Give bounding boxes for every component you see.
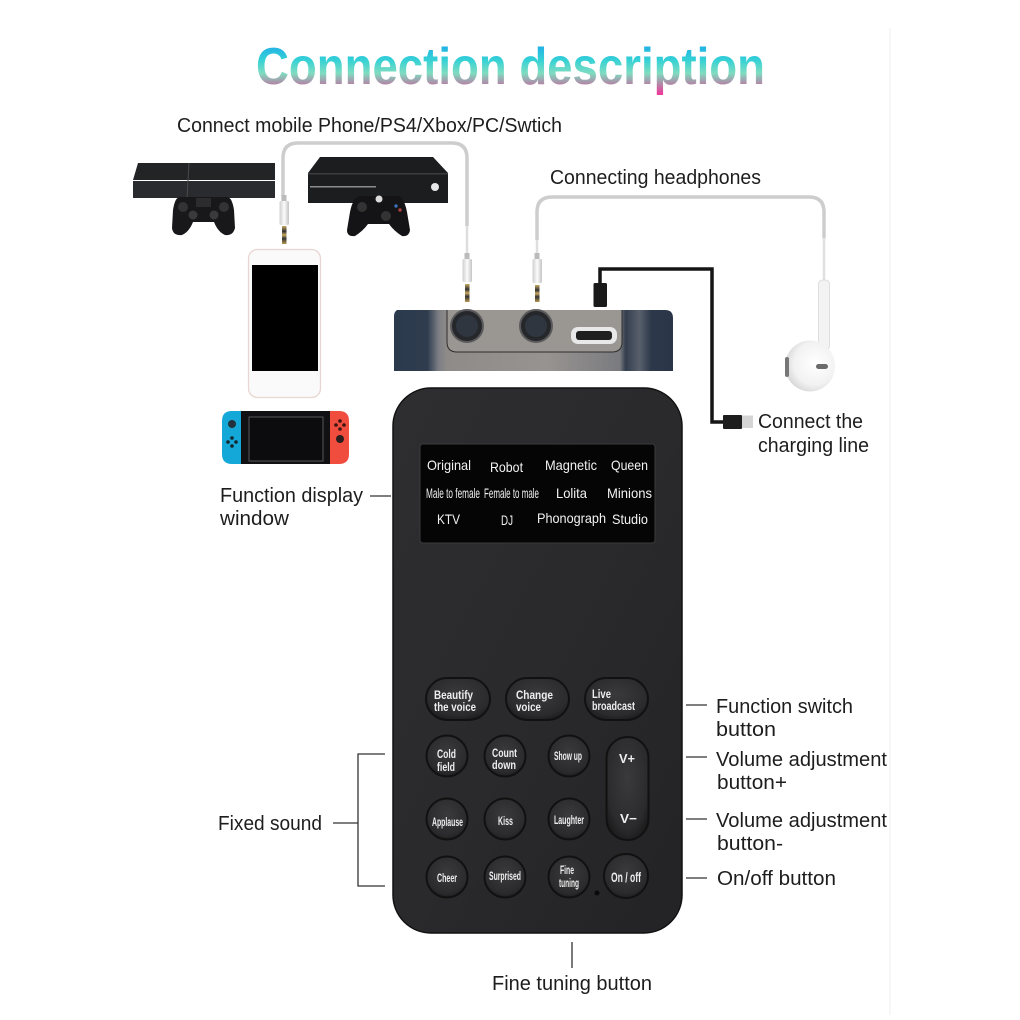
label: fixed sound: Fixed sound — [218, 813, 322, 835]
button: cold field — [426, 736, 468, 776]
icon: Nintendo Switch — [222, 411, 349, 464]
label: function display window: window — [219, 508, 290, 530]
button: beautify the voice: Beautify — [434, 690, 474, 702]
plug: device side — [462, 253, 472, 302]
button: applause — [426, 798, 468, 840]
button: volume rocker — [606, 737, 648, 840]
icon: Xbox controller — [347, 196, 410, 236]
jack: first audio socket — [451, 310, 483, 342]
port: micro USB socket — [571, 327, 617, 344]
function display window: KTV — [437, 511, 461, 527]
function display window: Male to female — [426, 485, 480, 501]
plug: USB A — [723, 415, 753, 429]
button: kiss — [484, 798, 526, 840]
panel: device body — [393, 388, 682, 933]
function display window: Studio — [612, 511, 648, 527]
button: fine tuning: Fine — [560, 865, 574, 877]
panel: device top ports — [394, 310, 673, 371]
button: count down — [484, 736, 526, 776]
button: on off — [604, 854, 648, 898]
jack: second audio socket — [520, 310, 552, 342]
function display window: Queen — [611, 457, 648, 473]
cable: charging cable — [594, 269, 753, 429]
button: kiss: Kiss — [498, 816, 513, 828]
button: live broadcast — [585, 678, 648, 720]
port recess — [447, 310, 622, 352]
button: count down: down — [492, 760, 516, 772]
button: cold field: field — [437, 762, 455, 774]
button: surprised: Surprised — [489, 871, 521, 883]
cable: headphone cable — [532, 197, 824, 302]
button: count down: Count — [492, 748, 517, 760]
button: live broadcast: broadcast — [592, 701, 635, 713]
label: volume down button: Volume adjustment — [716, 810, 887, 832]
button: on off: On / off — [611, 869, 641, 885]
function display window: Original — [427, 457, 471, 473]
button: cold field: Cold — [437, 749, 456, 761]
button: volume rocker: V− — [620, 811, 637, 826]
function display window: Minions — [607, 485, 652, 501]
label: charging line — [758, 411, 869, 457]
label: fine tuning button: Fine tuning button — [492, 973, 652, 995]
label: function display window — [219, 485, 391, 530]
function display window — [420, 444, 655, 543]
function display window: Lolita — [556, 485, 587, 501]
label: function switch button: Function switch — [716, 696, 853, 718]
label: function switch button: button — [716, 719, 776, 741]
heading: connecting headphones: Connecting headphones — [550, 167, 761, 189]
button: beautify the voice: the voice — [434, 702, 476, 714]
button: change voice: Change — [516, 690, 553, 702]
cable: device audio cable — [280, 143, 472, 302]
button: laughter: Laughter — [554, 815, 584, 827]
button: beautify the voice — [426, 678, 490, 720]
plug: micro USB — [594, 283, 607, 307]
button: change voice: voice — [516, 702, 541, 714]
button: cheer — [426, 856, 468, 898]
function display window: Phonograph — [537, 510, 606, 526]
label: on off button: On/off button — [717, 868, 836, 890]
label: charging line: charging line — [758, 435, 869, 457]
label: volume up button — [686, 749, 887, 794]
label: volume up button: button+ — [717, 772, 787, 794]
function display window: Female to male — [484, 485, 539, 501]
function display window: Magnetic — [545, 457, 597, 473]
button: laughter — [548, 798, 590, 840]
icon: Xbox console — [308, 157, 448, 203]
button: change voice — [506, 678, 569, 720]
label: fixed sound — [218, 754, 385, 886]
indicator hole — [594, 890, 600, 896]
button: applause: Applause — [432, 817, 463, 829]
label: function switch button — [686, 696, 853, 741]
button: volume rocker: V+ — [619, 751, 635, 766]
label: volume down button: button- — [717, 833, 783, 855]
button: fine tuning: tuning — [559, 878, 579, 890]
button: fine tuning — [548, 856, 590, 898]
button: show up: Show up — [554, 751, 582, 763]
plug: phone side — [280, 195, 289, 244]
button: surprised — [484, 856, 526, 898]
icon: PS4 controller — [172, 197, 235, 235]
title: Connection description — [256, 38, 765, 96]
button: cheer: Cheer — [437, 873, 457, 885]
icon: earphone — [785, 280, 835, 392]
function display window: DJ — [501, 512, 513, 528]
heading: connect devices: Connect mobile Phone/PS4/Xbox/PC/Swtich — [177, 115, 562, 137]
label: function display window: Function display — [220, 485, 363, 507]
icon: smartphone — [248, 250, 320, 398]
label: volume down button — [686, 810, 887, 855]
button: show up — [548, 736, 590, 776]
button: live broadcast: Live — [592, 689, 611, 701]
function display window: Robot — [490, 459, 523, 475]
phone screen — [252, 265, 318, 371]
icon: PS4 console — [133, 163, 275, 198]
plug: headphone jack — [532, 253, 542, 302]
label: volume up button: Volume adjustment — [716, 749, 887, 771]
label: charging line: Connect the — [758, 411, 863, 433]
